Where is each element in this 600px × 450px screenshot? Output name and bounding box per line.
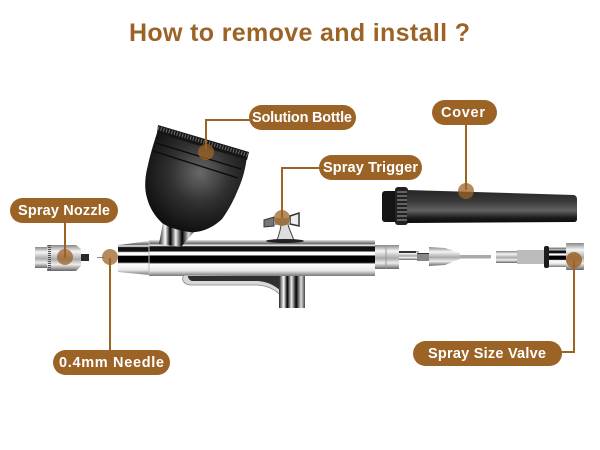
icon: bottle connector bbox=[159, 222, 194, 247]
callout: Solution Bottle: Solution Bottle bbox=[252, 110, 352, 126]
callout: Solution Bottle bbox=[198, 105, 356, 160]
callout: 0.4mm Needle: 0.4mm Needle bbox=[59, 355, 164, 371]
callout: Spray Trigger: Spray Trigger bbox=[323, 160, 418, 176]
callout: 0.4mm Needle bbox=[53, 249, 170, 375]
callout: Spray Size Valve: Spray Size Valve bbox=[428, 346, 546, 362]
icon: cover bbox=[382, 187, 577, 225]
callout: Spray Trigger bbox=[274, 155, 422, 226]
callout: Cover bbox=[432, 100, 497, 199]
icon: lever under body bbox=[183, 275, 281, 296]
icon: spray nozzle bbox=[35, 245, 104, 271]
callout: Spray Nozzle: Spray Nozzle bbox=[18, 203, 110, 219]
icon: solution bottle bbox=[145, 125, 249, 232]
callout: Cover: Cover bbox=[441, 105, 485, 121]
icon: trigger button bbox=[264, 213, 304, 243]
callout: Spray Nozzle bbox=[10, 198, 118, 265]
icon: airbrush body bbox=[118, 240, 375, 276]
icon: handle bbox=[279, 276, 305, 308]
icon: needle assembly bbox=[375, 245, 491, 269]
title: How to remove and install ? bbox=[129, 19, 470, 47]
callout: Spray Size Valve bbox=[413, 252, 582, 366]
icon: spray size valve bbox=[496, 243, 584, 270]
